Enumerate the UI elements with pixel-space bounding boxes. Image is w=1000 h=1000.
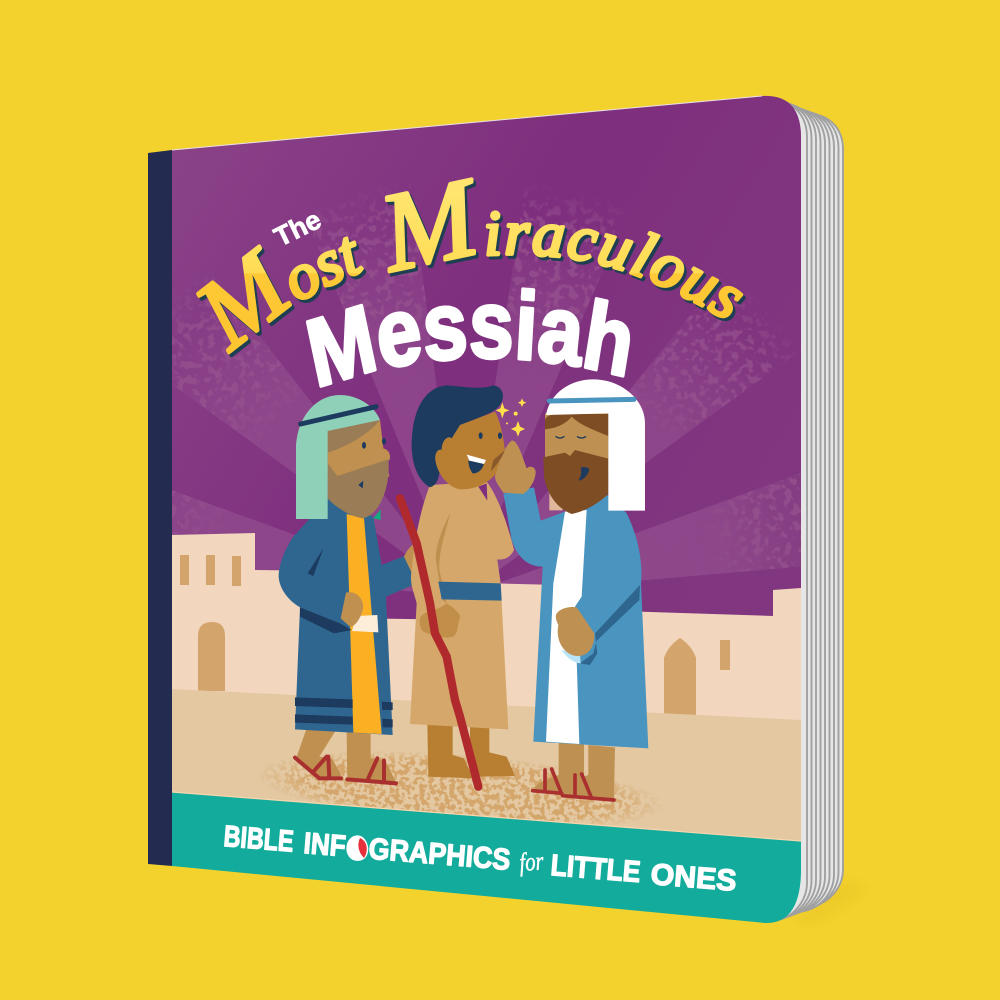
title: Miraculous: Miraculous [384,177,744,318]
neck gap [478,483,487,501]
sleeve shadows [300,548,352,633]
eyes [479,432,502,439]
ground [172,689,801,840]
cover edge highlight [172,96,762,150]
white sash [352,615,378,632]
face [328,420,390,477]
hem stripes [295,697,393,727]
sandals [533,769,614,800]
legs [427,723,515,778]
series name [222,820,738,898]
teal band [172,792,801,930]
title: The: The [269,204,326,252]
series name: Little: LITTLE [549,849,642,889]
sleeve shadow [580,585,640,665]
sparkles [496,398,526,437]
hand on belt [341,592,363,627]
robe [503,487,648,748]
three figures [279,379,648,800]
cuff [562,650,581,663]
hair [412,385,503,487]
series name: for: for [518,846,545,877]
closed eyes [556,437,586,438]
ground dust [263,752,657,824]
town buildings [172,533,801,730]
clasped hand [420,603,460,638]
ray speckle texture [172,194,801,570]
teeth [467,455,486,464]
page block [774,99,843,920]
belt [438,582,502,601]
headband [301,407,376,424]
neck [549,492,563,510]
book cover [172,96,801,923]
collar accent [373,509,381,520]
head wrap [546,379,645,511]
robe [279,498,417,735]
headband [549,399,634,401]
gold stripe [347,514,382,734]
sandals [295,757,396,783]
title [196,177,746,388]
tunic [410,482,514,729]
book mockup illustration [148,96,844,923]
spine [148,150,172,866]
hair [545,414,608,436]
mouth [468,461,484,473]
beard [328,459,389,518]
legs and feet [297,728,397,783]
series name: Graphics: GRAPHICS [367,833,512,877]
red infographic mark [358,838,367,858]
white inner garment [546,510,587,744]
staff [400,498,478,787]
series name: Ones: ONES [649,858,738,898]
right arched door [664,638,696,716]
eyes and mouth [358,438,386,488]
left man [279,395,429,783]
hand on staff [404,542,429,583]
middle boy [410,385,515,778]
series name: Inf: INF [302,827,347,863]
title: Most shadow: Most [199,239,366,358]
raised hand [495,441,536,494]
building windows [180,555,730,670]
series name: Bible: BIBLE [222,820,295,859]
tunic fold [436,513,450,603]
infographic O disc [346,835,368,861]
title: Most: Most [196,236,364,354]
title: Messiah: Messiah [306,287,630,388]
title: Miraculous shadow: Miraculous [387,180,746,322]
book shadow [790,878,870,925]
legs and feet [533,742,615,799]
mouth [578,467,589,481]
beard [543,450,608,514]
series name: O: O [345,833,370,868]
purple sky [172,96,801,620]
face [435,412,505,489]
raised hand shadow [491,450,505,472]
head wrap [296,395,380,519]
left arched door [198,622,225,691]
resting hand [556,607,594,656]
right man [491,379,648,800]
hair [328,420,380,453]
face [545,413,608,470]
sun rays [172,267,790,592]
